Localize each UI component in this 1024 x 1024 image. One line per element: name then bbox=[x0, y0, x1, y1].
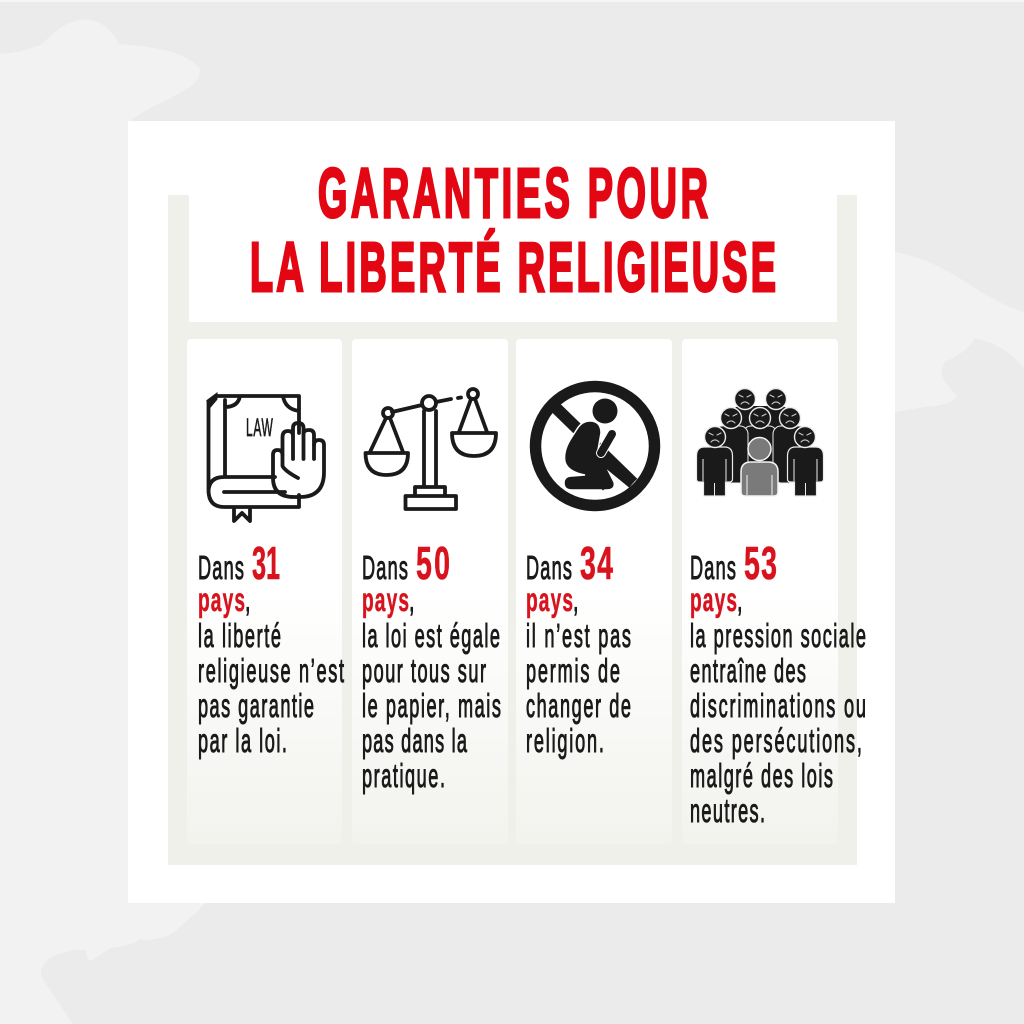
text: 53 pays bbox=[690, 538, 866, 829]
title: LA LIBERTÉ RELIGIEUSE bbox=[250, 228, 776, 306]
text: 31 pays: 31 bbox=[252, 537, 280, 589]
text: 34 pays bbox=[526, 538, 631, 759]
frame bbox=[168, 195, 857, 865]
text: 53 pays: , bbox=[737, 581, 743, 618]
title: GARANTIES POUR bbox=[318, 154, 708, 232]
icon: angry crowd around a person bbox=[696, 388, 824, 496]
text: 31 pays: par la loi. bbox=[198, 722, 287, 759]
panel: 31 pays bbox=[187, 339, 344, 844]
text: 53 pays: neutres. bbox=[690, 792, 765, 829]
text: 31 pays: religieuse n’est bbox=[198, 652, 344, 689]
text: 53 pays: malgré des lois bbox=[690, 757, 833, 794]
title bbox=[250, 154, 776, 306]
text: 34 pays: , bbox=[573, 581, 579, 618]
panel: 34 pays bbox=[516, 339, 672, 844]
text: 31 pays: Dans bbox=[198, 549, 244, 586]
icon: law book with raised hand bbox=[208, 395, 324, 521]
panel: 50 pays bbox=[352, 339, 508, 844]
panel: 53 pays bbox=[682, 339, 866, 844]
text: 50 pays: pas dans la bbox=[362, 722, 467, 759]
text: 53 pays: Dans bbox=[690, 549, 736, 586]
text: 53 pays: entraîne des bbox=[690, 652, 806, 689]
text: 34 pays: Dans bbox=[526, 549, 572, 586]
icon: unbalanced scales bbox=[366, 389, 496, 509]
text: 50 pays: 50 bbox=[416, 538, 450, 590]
text: 34 pays: religion. bbox=[526, 722, 604, 759]
text: 31 pays: pas garantie bbox=[198, 687, 314, 724]
text: 31 pays bbox=[198, 537, 344, 759]
text: 31 pays: pays bbox=[198, 582, 245, 618]
text: 50 pays bbox=[362, 538, 501, 794]
text: 53 pays: 53 bbox=[744, 538, 777, 590]
white card bbox=[128, 121, 895, 903]
text: 34 pays: pays bbox=[526, 582, 573, 618]
text: 53 pays: la pression sociale bbox=[690, 617, 866, 654]
LAW label: LAW bbox=[246, 414, 273, 442]
text: 50 pays: Dans bbox=[362, 549, 408, 586]
text: 53 pays: discriminations ou bbox=[690, 687, 866, 724]
text: 31 pays: , bbox=[245, 581, 251, 618]
text: 31 pays: la liberté bbox=[198, 617, 281, 654]
text: 53 pays: des persécutions, bbox=[690, 722, 862, 759]
text: 34 pays: 34 bbox=[580, 538, 614, 590]
text: 50 pays: pratique. bbox=[362, 757, 445, 794]
text: 34 pays: changer de bbox=[526, 687, 631, 724]
text: 50 pays: la loi est égale bbox=[362, 617, 500, 654]
text: 34 pays: il n’est pas bbox=[526, 617, 631, 654]
icon: prohibited prayer bbox=[536, 386, 654, 506]
text: 50 pays: pays bbox=[362, 582, 409, 618]
text: 53 pays: pays bbox=[690, 582, 737, 618]
text: 34 pays: permis de bbox=[526, 652, 620, 689]
text: 50 pays: pour tous sur bbox=[362, 652, 486, 689]
text: 50 pays: le papier, mais bbox=[362, 687, 501, 724]
text: 50 pays: , bbox=[409, 581, 415, 618]
